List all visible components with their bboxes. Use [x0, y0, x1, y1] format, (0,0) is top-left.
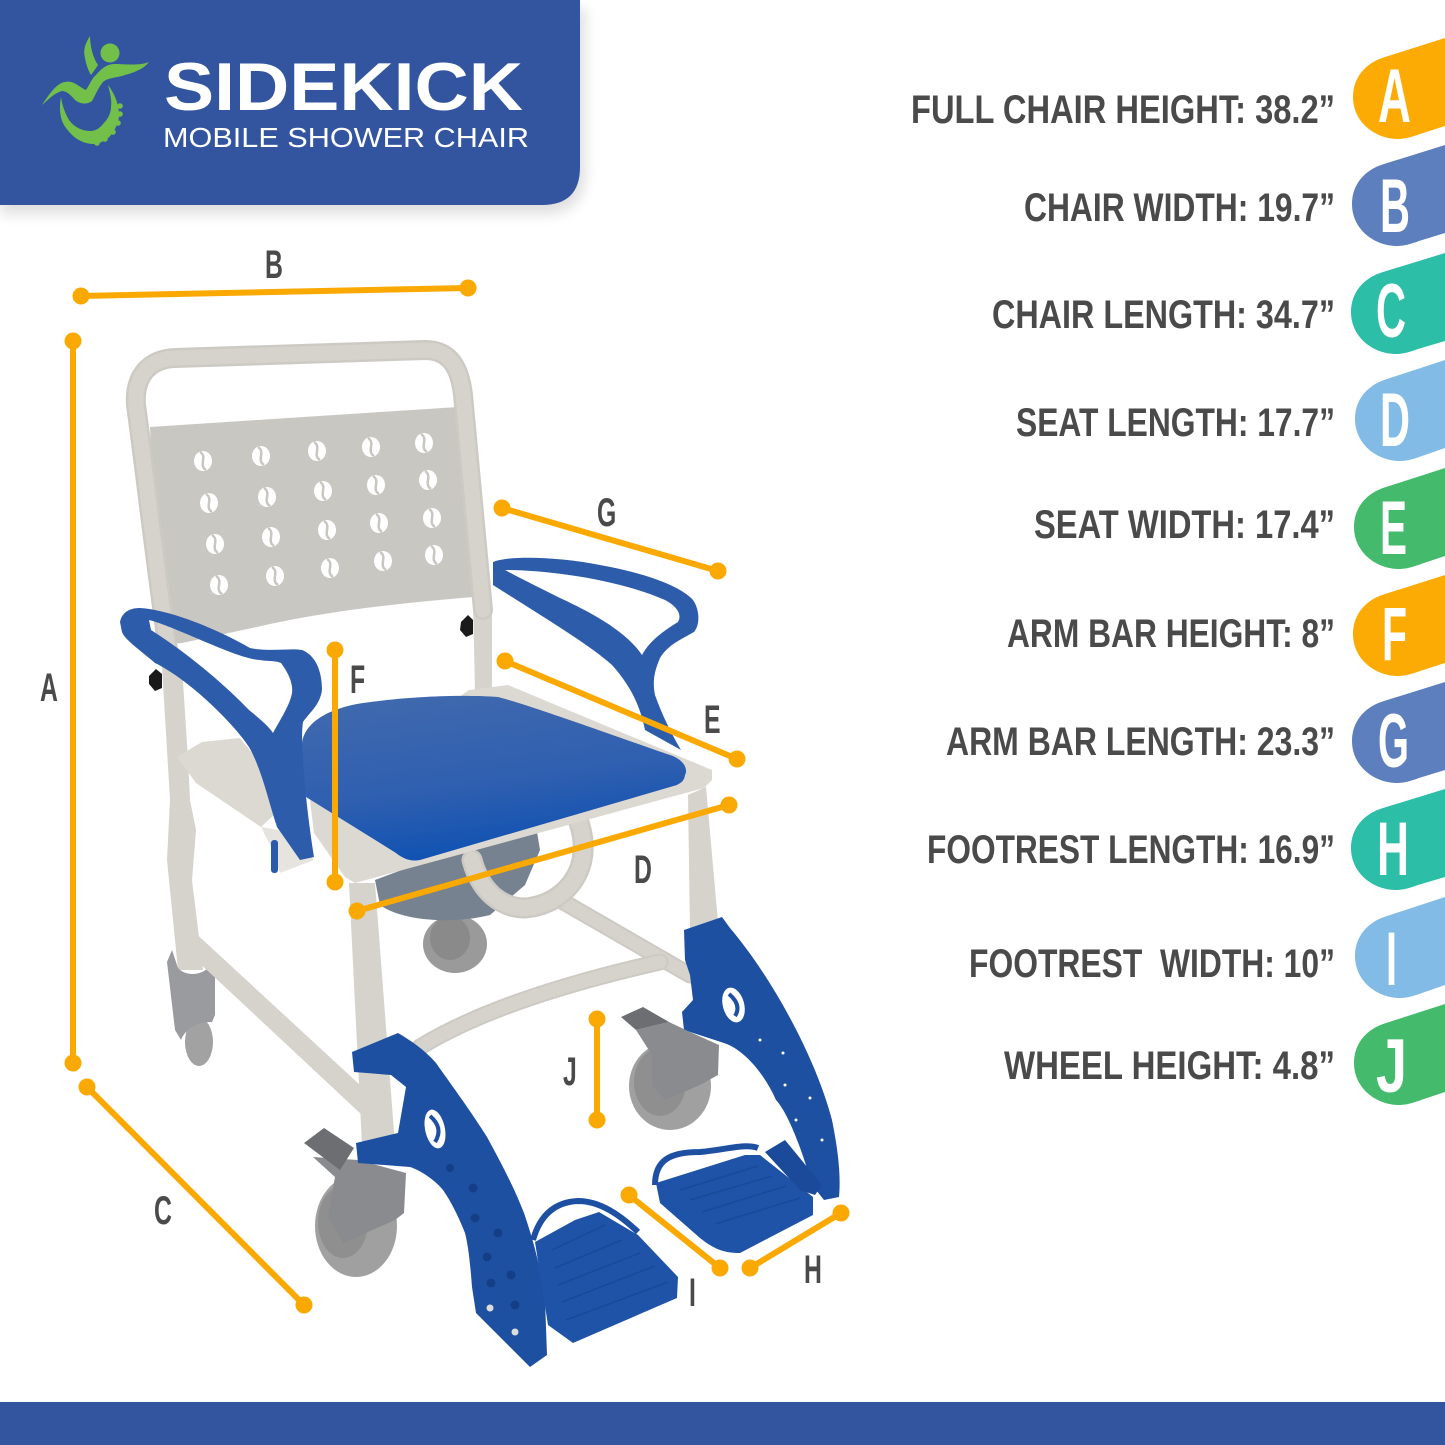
- row F: ARM BAR HEIGHT: 8”: [1007, 612, 1335, 656]
- dimension D: D: [634, 848, 652, 893]
- row D: [1016, 360, 1445, 463]
- backrest panel: [150, 407, 473, 645]
- right footrest bracket: [682, 917, 840, 1200]
- dimension I: I: [689, 1271, 696, 1316]
- dimension C: C: [154, 1189, 172, 1234]
- seat cushion: [302, 696, 686, 861]
- left side bar: [180, 928, 362, 1115]
- row H: H: [1377, 807, 1409, 892]
- dimension D: [348, 796, 738, 920]
- row A: A: [1378, 54, 1411, 139]
- front right leg: [688, 787, 718, 930]
- dimension F: F: [350, 658, 365, 703]
- right armrest: [493, 558, 698, 750]
- row F: F: [1382, 592, 1407, 677]
- seat base: [177, 685, 712, 883]
- far cross bar: [560, 900, 690, 975]
- dimension B: [72, 243, 476, 304]
- row H: FOOTREST LENGTH: 16.9”: [927, 828, 1335, 872]
- dimension E: E: [704, 698, 721, 743]
- row G: G: [1378, 699, 1409, 784]
- knob left: [149, 669, 162, 691]
- dimension F: [326, 642, 365, 890]
- left front caster: [304, 1128, 406, 1277]
- dimension H: [742, 1204, 850, 1293]
- right front caster: [621, 1007, 719, 1130]
- row A: FULL CHAIR HEIGHT: 38.2”: [911, 88, 1335, 132]
- footer bar: [0, 1402, 1445, 1445]
- row D: D: [1380, 378, 1410, 463]
- row F: [1007, 575, 1445, 677]
- row G: ARM BAR LENGTH: 23.3”: [946, 720, 1335, 764]
- dimension G: G: [597, 491, 616, 536]
- row A: [911, 38, 1445, 139]
- dimension A: [40, 332, 82, 1072]
- right rear leg: [473, 600, 492, 692]
- specification list: [911, 38, 1445, 1109]
- commode bucket: [375, 820, 540, 920]
- row E: SEAT WIDTH: 17.4”: [1034, 503, 1335, 547]
- row J: [1004, 1004, 1445, 1109]
- row J: J: [1376, 1024, 1407, 1109]
- dimension lines: [40, 243, 850, 1316]
- row I: [969, 897, 1445, 1002]
- row D: SEAT LENGTH: 17.7”: [1016, 401, 1335, 445]
- right footrest plate: [655, 1140, 822, 1253]
- row C: CHAIR LENGTH: 34.7”: [992, 293, 1335, 337]
- backrest tube frame: [136, 350, 483, 650]
- left rear caster: [167, 950, 215, 1066]
- row J: WHEEL HEIGHT: 4.8”: [1004, 1044, 1335, 1088]
- perforation holes in backrest: [194, 433, 443, 595]
- hinge bracket: [261, 827, 314, 873]
- dimension E: [496, 652, 746, 768]
- header banner: [0, 0, 585, 214]
- row I: I: [1386, 917, 1397, 1002]
- dimension I: [620, 1186, 728, 1316]
- knob right: [460, 615, 473, 637]
- left armrest: [120, 608, 322, 860]
- dimension A: A: [40, 666, 58, 711]
- dimension G: [494, 491, 726, 580]
- left rear leg: [161, 650, 203, 970]
- row C: C: [1376, 269, 1406, 354]
- left footrest bracket: [352, 1033, 547, 1367]
- brand name: SIDEKICK: [164, 49, 523, 125]
- row I: FOOTREST WIDTH: 10”: [969, 942, 1335, 986]
- row H: [927, 789, 1445, 892]
- front cross bar: [420, 962, 660, 1047]
- dimension C: [78, 1078, 312, 1314]
- dimension B: B: [265, 243, 283, 288]
- row E: E: [1380, 486, 1407, 571]
- row B: B: [1380, 164, 1410, 249]
- row G: [946, 682, 1445, 784]
- dimension H: H: [804, 1248, 822, 1293]
- dimension J: [563, 1010, 606, 1128]
- row C: [992, 253, 1445, 354]
- rear right caster: [423, 915, 487, 973]
- row B: [1024, 145, 1445, 249]
- left footrest plate: [533, 1201, 678, 1343]
- icon: logo: [42, 36, 149, 146]
- dimension J: J: [563, 1050, 577, 1095]
- shower chair illustration: [120, 350, 840, 1367]
- row E: [1034, 468, 1445, 571]
- row B: CHAIR WIDTH: 19.7”: [1024, 186, 1335, 230]
- brand subtitle: MOBILE SHOWER CHAIR: [163, 122, 529, 153]
- u-shaped support tube: [472, 820, 583, 908]
- front left leg: [349, 883, 395, 1145]
